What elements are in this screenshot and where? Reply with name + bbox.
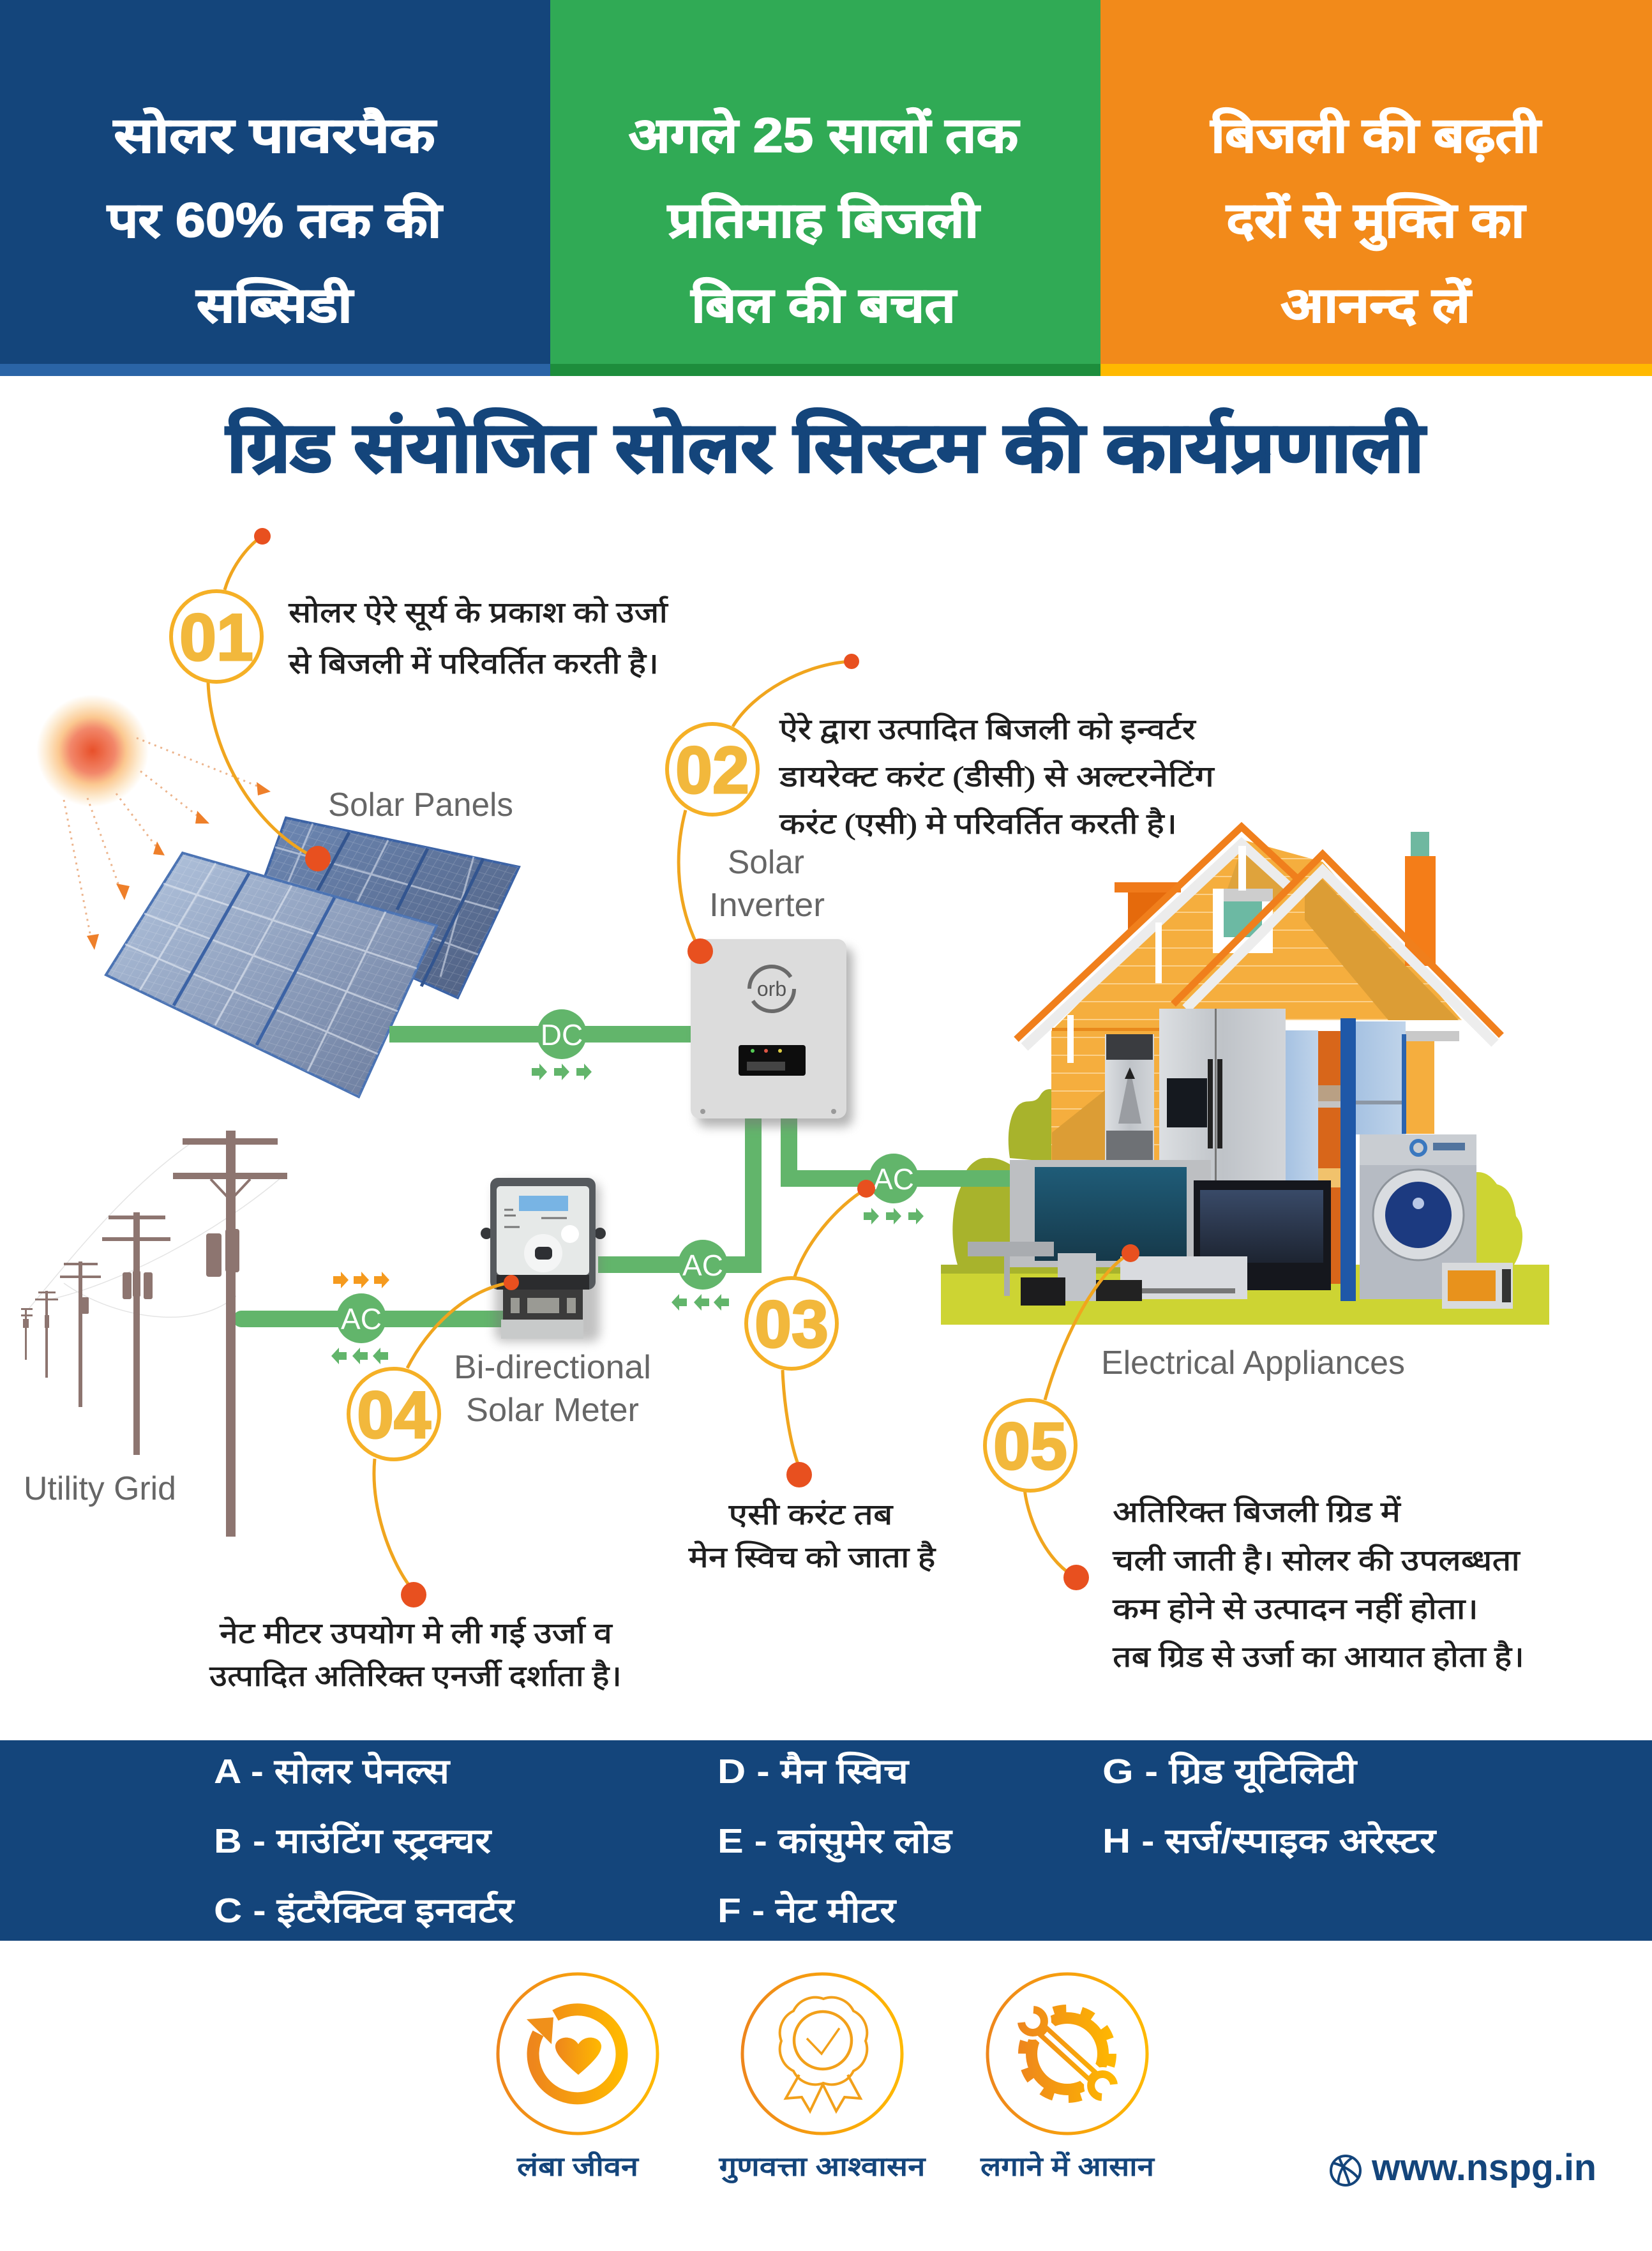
arrows: to meter [672, 1294, 729, 1311]
label: bi-directional solar meter [454, 1349, 651, 1429]
callout 02: करंट (एसी) मे परिवर्तित करती है। [779, 807, 1177, 840]
legend panel: G - ग्रिड यूटिलिटी [1102, 1751, 1358, 1793]
header panel: savings [550, 0, 1100, 376]
callout 02: 02 [675, 734, 749, 808]
header panel: subsidy: सोलर पावरपैक [112, 107, 437, 163]
callout 01 [171, 528, 668, 871]
legend panel [0, 1740, 1652, 1941]
air conditioner tower [1105, 1034, 1154, 1160]
callout 01: से बिजली में परिवर्तित करती है। [289, 647, 659, 680]
icon: sun with rays [36, 695, 271, 950]
bi-directional meter [481, 1178, 606, 1342]
pole 1 [173, 1131, 287, 1537]
label: utility grid: Utility Grid [24, 1470, 176, 1507]
title: ग्रिड संयोजित सोलर सिस्टम की कार्यप्रणाली [225, 408, 1427, 486]
callout 05: अतिरिक्त बिजली ग्रिड में [1113, 1495, 1402, 1528]
legend panel: F - नेट मीटर [717, 1890, 897, 1930]
main television [1010, 1160, 1211, 1267]
bushes [952, 1089, 1522, 1265]
attic window [1213, 889, 1273, 953]
open fridge [1286, 1018, 1406, 1301]
arrows: to home [864, 1208, 924, 1224]
label: long life: लंबा जीवन [516, 2151, 640, 2181]
label: bi-directional solar meter: Solar Meter [466, 1392, 639, 1429]
callout 05: तब ग्रिड से उर्जा का आयात होता है। [1113, 1640, 1524, 1673]
inverter display [739, 1045, 806, 1076]
label: easy install: लगाने में आसान [980, 2151, 1155, 2181]
callout 03: मेन स्विच को जाता है [688, 1540, 936, 1574]
double door fridge [1159, 1009, 1286, 1200]
wires [241, 1034, 1010, 1319]
legend panel: E - कांसुमेर लोड [717, 1821, 953, 1863]
second television [1194, 1180, 1331, 1290]
header panel: subsidy [0, 0, 550, 376]
icon: long life [498, 1974, 657, 2134]
icon: globe [1331, 2156, 1360, 2185]
label: quality assurance: गुणवत्ता आश्वासन [718, 2151, 926, 2183]
ground [941, 1265, 1549, 1325]
microwave [1442, 1263, 1513, 1309]
callout 03: 03 [755, 1288, 829, 1362]
label: electrical appliances: Electrical Appliances [1101, 1344, 1405, 1381]
overhead cables [29, 1143, 281, 1317]
callout 05: 05 [993, 1410, 1067, 1484]
callout 04: 04 [357, 1378, 431, 1452]
label: solar inverter: Solar [728, 844, 804, 881]
callout 05 [985, 1244, 1524, 1673]
AC badge: meter: AC [682, 1249, 723, 1282]
header panel: savings: अगले 25 सालों तक [629, 107, 1020, 163]
callout 04 [209, 1275, 622, 1692]
header panel: rates: आनन्द लें [1280, 277, 1472, 333]
DC badge: DC [541, 1018, 583, 1051]
header panel: subsidy: पर 60% तक की [106, 192, 443, 248]
left chimney [1115, 882, 1181, 932]
AC badge: home: AC [873, 1163, 914, 1196]
callout 03 [688, 1180, 936, 1574]
inverter logo [749, 967, 794, 1011]
AC badge: grid: AC [341, 1302, 382, 1336]
header panel: rates: बिजली की बढ़ती [1210, 107, 1542, 163]
house and appliances [941, 827, 1549, 1325]
callout 01: सोलर ऐरे सूर्य के प्रकाश को उर्जा [289, 596, 668, 631]
right chimney [1405, 832, 1436, 966]
legend panel: C - इंटरैक्टिव इनवर्टर [214, 1890, 515, 1930]
header panel: rates: दरों से मुक्ति का [1225, 192, 1526, 251]
label: solar inverter: Inverter [709, 887, 825, 924]
left roof [1016, 827, 1296, 1063]
legend panel: B - माउंटिंग स्ट्रक्चर [214, 1821, 492, 1861]
pole 4 [35, 1291, 58, 1378]
legend panel: D - मैन स्विच [717, 1751, 910, 1791]
callout 05: कम होने से उत्पादन नहीं होता। [1113, 1592, 1478, 1625]
inverter logo: orb [757, 977, 786, 1000]
callout 01: 01 [179, 601, 253, 675]
callout 02 [667, 654, 1215, 964]
callout 02: डायरेक्ट करंट (डीसी) से अल्टरनेटिंग [779, 760, 1215, 793]
solar inverter [691, 939, 853, 1127]
front panels [106, 853, 437, 1097]
header panel: savings: प्रतिमाह बिजली [666, 192, 980, 248]
back panels [254, 818, 519, 998]
solar panels [106, 818, 519, 1097]
icon: easy install [987, 1974, 1147, 2134]
callout 02: ऐरे द्वारा उत्पादित बिजली को इन्वर्टर [779, 712, 1196, 746]
arrows: grid export [331, 1348, 388, 1364]
icon: quality assurance [742, 1974, 902, 2134]
website: www.nspg.in [1371, 2147, 1596, 2188]
AC badge: meter [678, 1240, 728, 1290]
arrows: grid import [333, 1272, 389, 1288]
label: solar inverter [709, 844, 825, 924]
split ac and media [968, 1242, 1247, 1306]
header panel: subsidy: सब्सिडी [195, 277, 354, 333]
pole 5 [21, 1308, 33, 1360]
callout 04: नेट मीटर उपयोग मे ली गई उर्जा व [220, 1616, 613, 1650]
callout 04: उत्पादित अतिरिक्त एनर्जी दर्शाता है। [209, 1659, 622, 1692]
callout 03: एसी करंट तब [729, 1498, 893, 1531]
walls [1051, 839, 1462, 1160]
legend panel: A - सोलर पेनल्स [214, 1751, 451, 1791]
legend panel: H - सर्ज/स्पाइक अरेस्टर [1102, 1821, 1437, 1860]
callout 05: चली जाती है। सोलर की उपलब्धता [1113, 1544, 1521, 1577]
washing machine [1360, 1134, 1476, 1299]
AC badge: home [869, 1154, 919, 1203]
DC badge [537, 1009, 587, 1059]
pole 3 [60, 1261, 101, 1407]
header panel: rates [1100, 0, 1652, 376]
right roof [1173, 854, 1501, 1043]
label: solar panels: Solar Panels [328, 787, 513, 824]
arrows: dc flow [532, 1064, 592, 1080]
header panel: savings: बिल की बचत [690, 277, 957, 333]
AC badge: grid [336, 1293, 386, 1343]
label: bi-directional solar meter: Bi-directional [454, 1349, 651, 1386]
pole 2 [102, 1212, 170, 1455]
utility grid poles [21, 1131, 287, 1537]
